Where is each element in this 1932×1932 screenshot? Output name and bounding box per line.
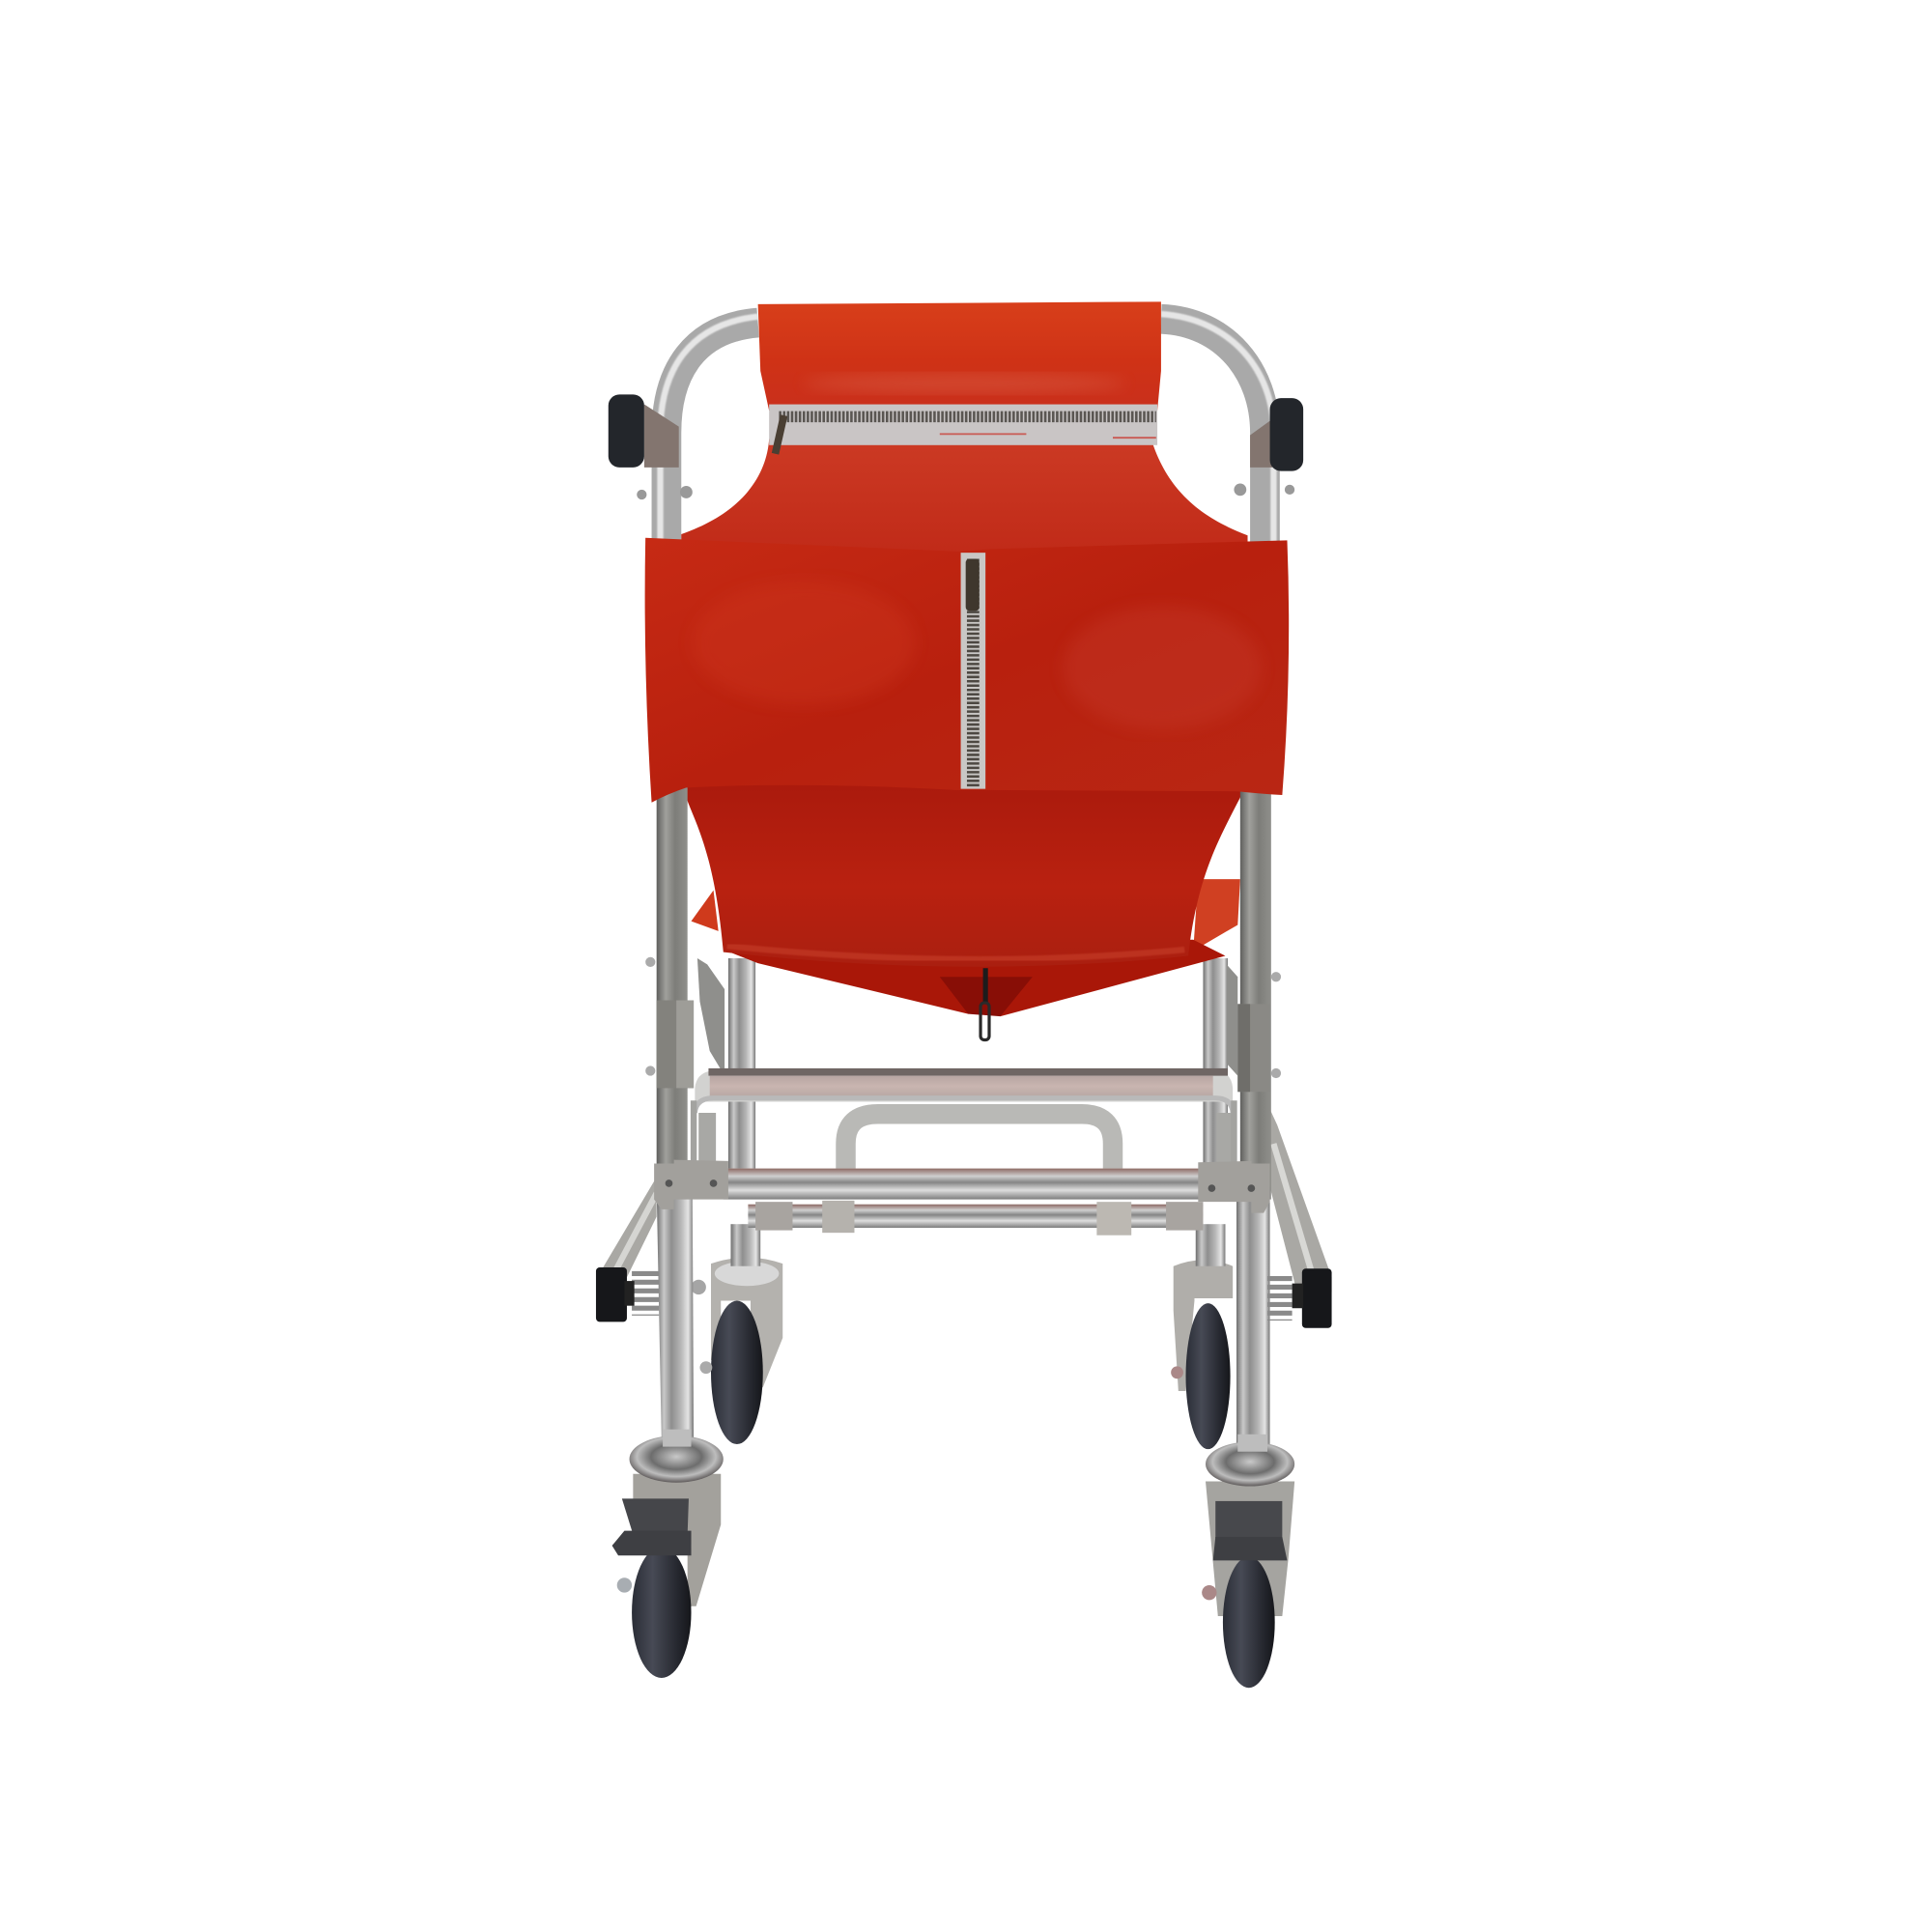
pocket sheen right [1064,606,1262,729]
caster stems [730,1224,1225,1266]
right lower tube [1236,1187,1270,1449]
vertical zipper [961,553,985,789]
seat sling left [692,891,719,931]
headrest sheen [804,374,1125,393]
right tube highlight [1161,314,1273,547]
lower back shading [727,946,1184,959]
headrest flap [758,301,1161,411]
upper cross tube with joints [654,1160,1270,1213]
top zipper [769,405,1157,454]
right collar bracket [1237,972,1281,1092]
foot plate [694,1068,1234,1169]
front left caster [612,1430,724,1678]
left knob and bracket [609,394,693,499]
rear uprights [697,958,1237,1169]
left main tube [657,767,688,1200]
under-seat panel [724,940,1225,1016]
rear left caster [692,1258,782,1444]
left lower tube [657,1187,694,1440]
front right caster [1202,1435,1294,1688]
main pocket [645,538,1289,803]
rear right caster [1171,1260,1233,1449]
right knob and bracket [1234,398,1303,496]
right black knob with spring [1280,1268,1332,1328]
upper back panel [681,439,1248,556]
lower cross bar and sleeves [748,1201,1203,1236]
right top tube [1161,319,1264,547]
right main tube [1240,767,1271,1200]
left black knob with spring [596,1267,645,1321]
right side rail [1270,1109,1332,1293]
left side rail [597,1178,657,1293]
left collar bracket [645,957,694,1088]
seat sling right [1193,879,1240,951]
left top tube [667,323,758,547]
folding handle U-bar [846,1114,1113,1169]
pocket sheen left [693,582,915,705]
left tube highlight [661,317,758,547]
bottom zip and pull [980,968,989,1039]
lower back fabric [680,767,1246,967]
